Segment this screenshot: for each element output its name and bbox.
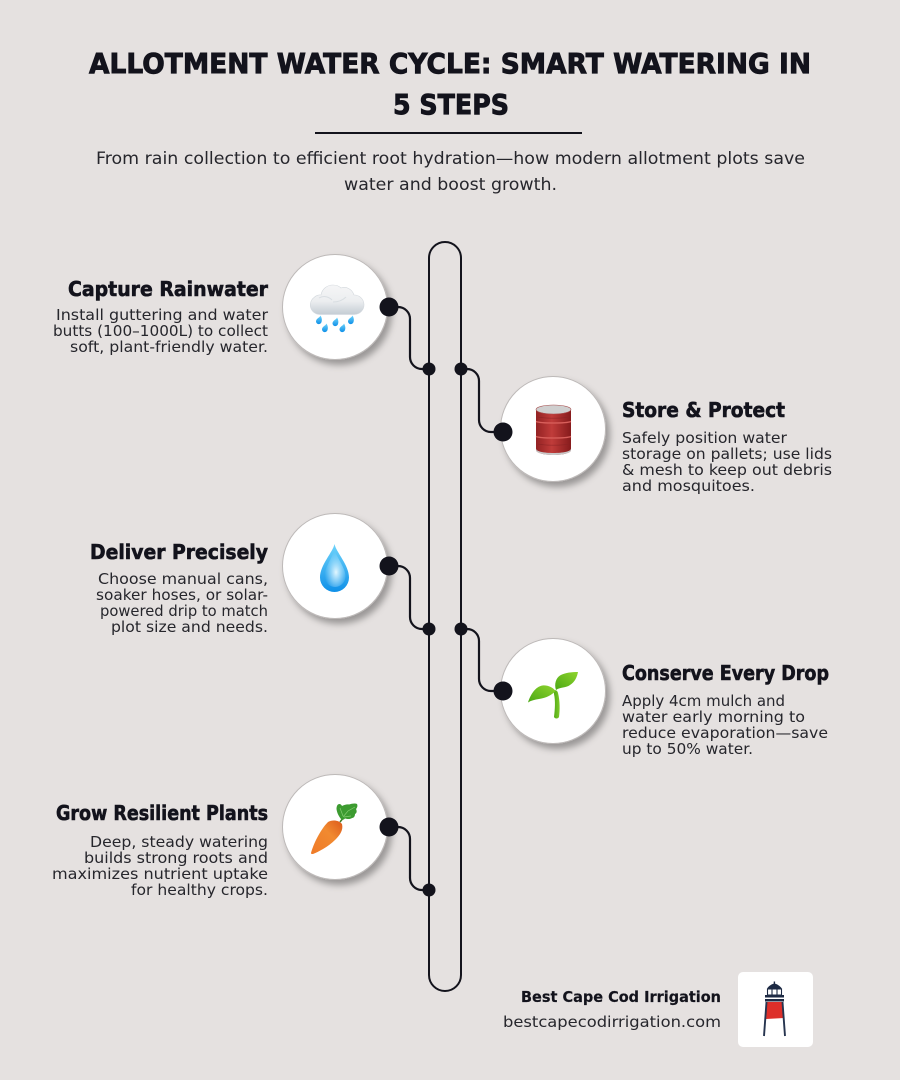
step 3 text: soaker hoses, or solar- (96, 586, 268, 604)
step 4 text: Apply 4cm mulch and (622, 692, 785, 710)
icon: oil barrel (536, 405, 571, 455)
step 1 text: butts (100–1000L) to collect (53, 322, 268, 340)
connector 3 (380, 556, 436, 636)
connector 5 (380, 818, 436, 896)
connector 1 (380, 298, 436, 376)
step 1 text: soft, plant-friendly water. (70, 338, 268, 356)
title: ALLOTMENT WATER CYCLE: SMART WATERING IN (89, 47, 811, 80)
step 3 text: plot size and needs. (111, 618, 268, 636)
step 5 text: maximizes nutrient uptake (52, 865, 268, 883)
step 4 text: Conserve Every Drop (622, 661, 829, 685)
step 5: grow resilient plants (52, 774, 436, 899)
title (89, 47, 811, 121)
step 2 text: Safely position water (622, 429, 788, 447)
icon: carrot (311, 803, 357, 854)
step 3 text: powered drip to match (100, 602, 268, 620)
central pipe loop (429, 242, 461, 991)
step 1 text (53, 277, 269, 356)
connector 2 (454, 362, 512, 442)
step 3: deliver precisely (90, 514, 436, 636)
step 3 text: Deliver Precisely (90, 540, 268, 564)
connector 4 (454, 622, 512, 700)
step 5 text: for healthy crops. (131, 881, 268, 899)
subtitle: water and boost growth. (344, 175, 557, 195)
step 4 text: water early morning to (622, 708, 805, 726)
step 5 badge circle (282, 774, 388, 880)
title: 5 STEPS (393, 88, 509, 121)
footer brand text: Best Cape Cod Irrigation (521, 988, 721, 1006)
footer brand text: bestcapecodirrigation.com (503, 1013, 721, 1031)
step 2 text: and mosquitoes. (622, 477, 755, 495)
step 4 text (622, 661, 829, 758)
step 3 badge circle (282, 514, 388, 618)
step 4 text: reduce evaporation—save (622, 724, 828, 742)
step 4 text: up to 50% water. (622, 740, 753, 758)
step 2 text (622, 398, 832, 495)
step 2 text: storage on pallets; use lids (622, 445, 832, 463)
step 5 text: Deep, steady watering (90, 833, 268, 851)
subtitle: From rain collection to efficient root hydration—how modern allotment plots save (96, 149, 805, 169)
step 2 text: Store & Protect (622, 398, 785, 422)
footer brand text (503, 988, 721, 1031)
step 1: capture rainwater (53, 254, 436, 376)
step 1 text: Install guttering and water (56, 306, 269, 324)
step 4 badge circle (500, 638, 606, 744)
step 1 badge circle (282, 254, 388, 360)
icon: seedling (528, 672, 578, 718)
step 1 text: Capture Rainwater (68, 277, 268, 301)
step 5 text: builds strong roots and (84, 849, 268, 867)
step 3 text: Choose manual cans, (98, 570, 268, 588)
icon: water drop (320, 544, 349, 592)
step 4: conserve every drop (454, 622, 829, 758)
step 2: store and protect (454, 362, 832, 495)
icon: rain cloud (310, 285, 364, 332)
step 2 text: & mesh to keep out debris (622, 461, 832, 479)
step 2 badge circle (500, 376, 606, 482)
title underline (315, 132, 582, 134)
step 5 text: Grow Resilient Plants (56, 801, 268, 825)
step 3 text (90, 540, 268, 636)
step 5 text (52, 801, 268, 899)
subtitle (96, 149, 805, 195)
logo: lighthouse (738, 972, 813, 1047)
